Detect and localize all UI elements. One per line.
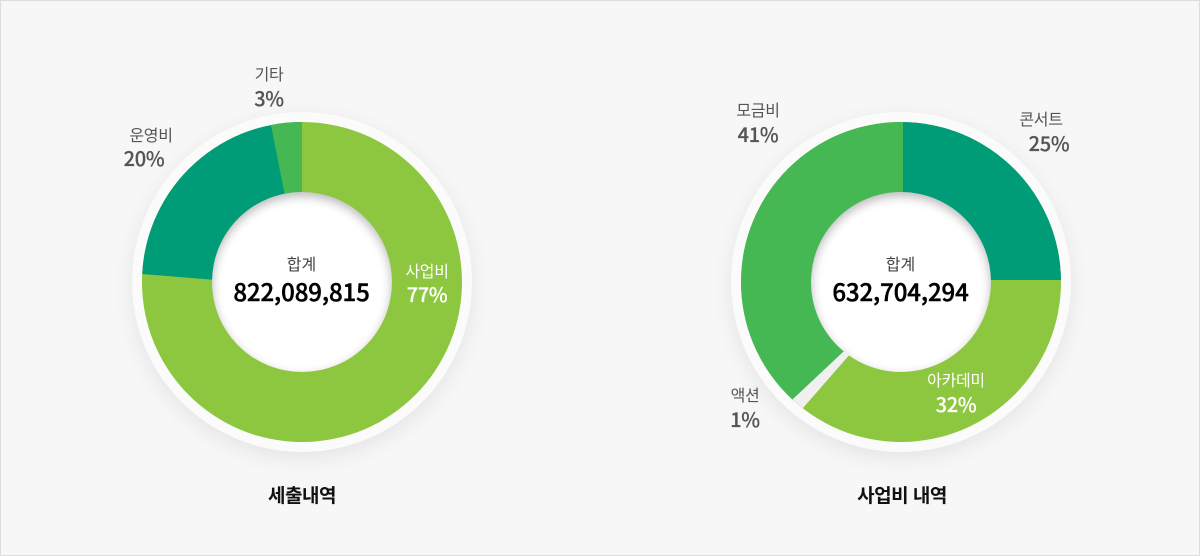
panel: 세출내역 chart <box>124 61 473 508</box>
label: 콘서트 25%: 콘서트 <box>1019 106 1063 130</box>
label: 모금비 41% <box>736 97 780 148</box>
center total: 합계 822,089,815 <box>233 251 370 308</box>
label: 액션 1%: 액션 <box>731 382 759 406</box>
donut chart: 세출내역 <box>142 122 462 442</box>
label: 사업비 77% <box>405 258 449 308</box>
panel: 사업비 내역 chart <box>730 97 1072 508</box>
label: 모금비 41%: 모금비 <box>736 97 780 121</box>
donut chart: 사업비 내역 <box>741 122 1061 442</box>
label: 사업비 77%: 77% <box>407 279 447 308</box>
center total: 합계 632,704,294: 합계 <box>886 251 915 275</box>
label: 콘서트 25%: 25% <box>1029 128 1069 157</box>
label: 액션 1% <box>730 382 760 433</box>
label: 기타 3% <box>254 61 284 112</box>
label: 운영비 20%: 운영비 <box>129 122 173 146</box>
chart title: 사업비 내역: 사업비 내역 <box>857 481 947 508</box>
label: 기타 3%: 기타 <box>255 61 283 85</box>
label: 기타 3%: 3% <box>254 83 284 112</box>
label: 운영비 20% <box>124 122 173 172</box>
label: 운영비 20%: 20% <box>124 143 164 172</box>
donut hole: 사업비 내역 <box>811 192 991 372</box>
donut outer ring: 사업비 내역 <box>731 112 1071 452</box>
center total: 합계 632,704,294 <box>832 251 969 308</box>
donut outer ring: 세출내역 <box>132 112 472 452</box>
label: 모금비 41%: 41% <box>738 119 778 148</box>
center total: 합계 632,704,294: 632,704,294 <box>832 273 969 308</box>
donut hole: 세출내역 <box>212 192 392 372</box>
label: 사업비 77%: 사업비 <box>405 258 449 282</box>
center total: 합계 822,089,815: 822,089,815 <box>233 273 370 308</box>
label: 액션 1%: 1% <box>730 404 760 433</box>
chart title: 세출내역: 세출내역 <box>268 481 336 508</box>
label: 아카데미 32%: 32% <box>936 389 976 418</box>
label: 콘서트 25% <box>1019 106 1069 157</box>
label: 아카데미 32% <box>927 367 985 418</box>
center total: 합계 822,089,815: 합계 <box>287 251 316 275</box>
label: 아카데미 32%: 아카데미 <box>927 367 985 391</box>
